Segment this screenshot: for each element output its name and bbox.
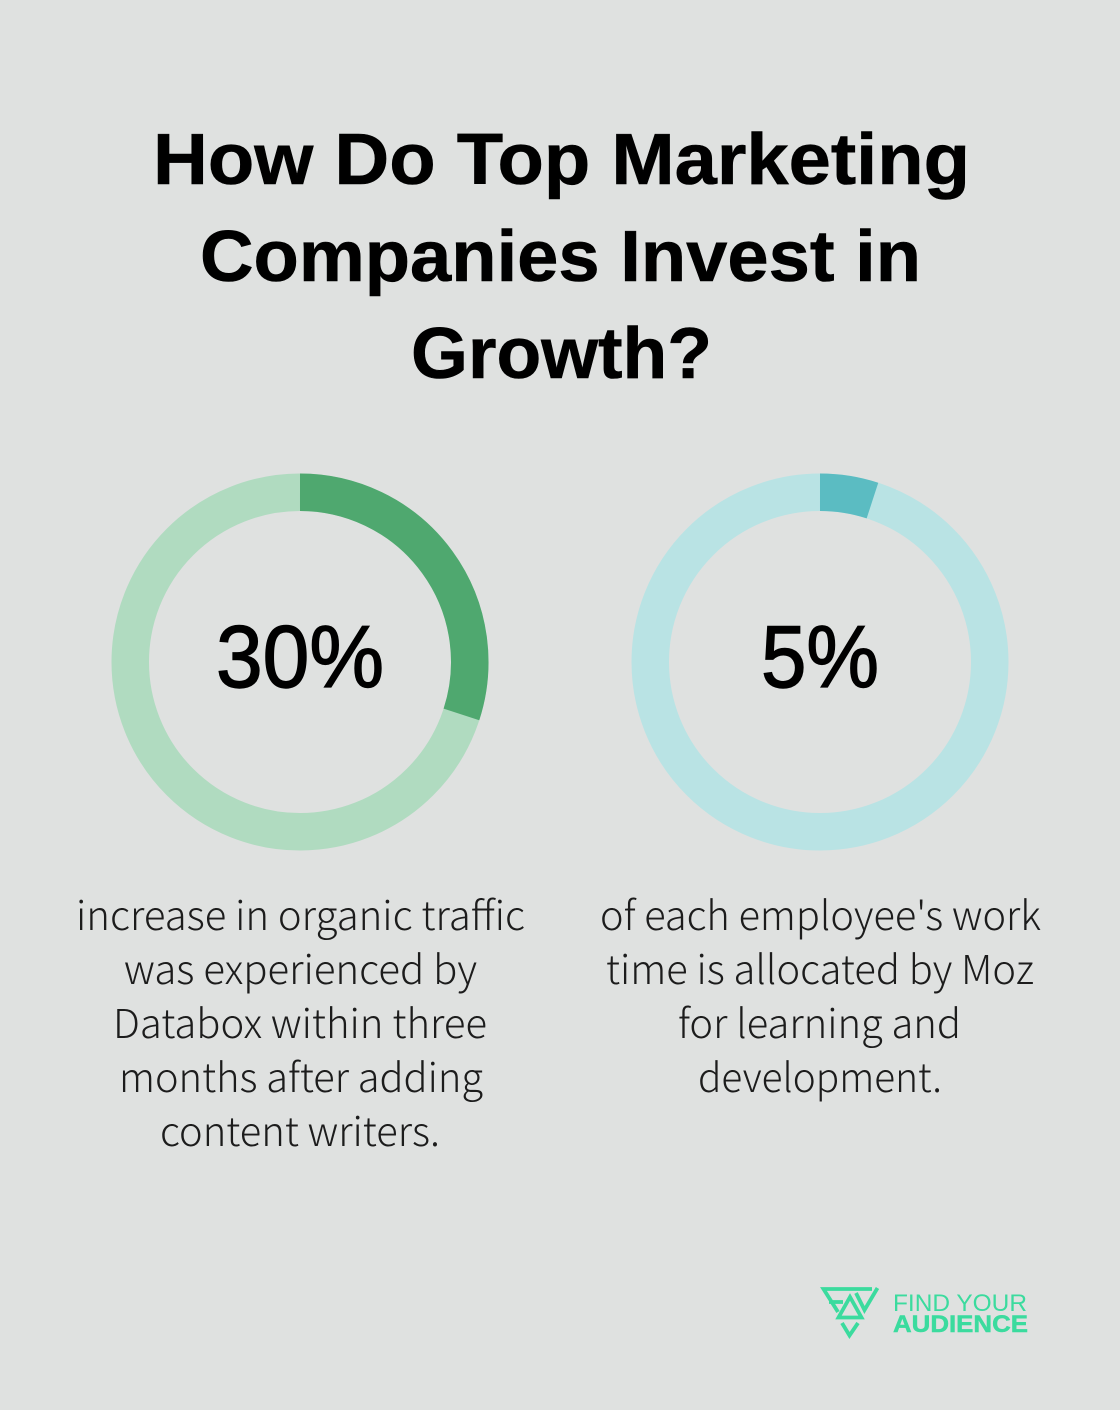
description: 5%: development. xyxy=(698,1046,942,1104)
description: 30%: content writers. xyxy=(160,1100,440,1158)
title: Growth? xyxy=(411,314,712,394)
description: 5%: of each employee's work xyxy=(600,884,1041,942)
description: 30%: months after adding xyxy=(119,1046,483,1104)
donut chart: 30% xyxy=(130,492,470,832)
donut chart: 5% xyxy=(650,492,990,832)
description: 30% xyxy=(76,884,525,1158)
description: 30%: was experienced by xyxy=(124,938,477,996)
stat value: 5%: 5% xyxy=(761,607,879,706)
description: 5%: for learning and xyxy=(678,992,961,1050)
logo wordmark xyxy=(893,1290,1028,1338)
title: Companies Invest in xyxy=(200,217,921,297)
description: 5%: time is allocated by Moz xyxy=(606,938,1034,996)
stat value: 30%: 30% xyxy=(216,607,384,706)
title: How Do Top Marketing xyxy=(153,120,970,200)
logo: Find Your Audience xyxy=(824,1288,1028,1338)
icon: logo mark xyxy=(824,1288,878,1336)
panel: 30% statistic xyxy=(76,492,525,1158)
logo wordmark: AUDIENCE xyxy=(893,1311,1028,1338)
description: 30%: increase in organic traffic xyxy=(76,884,525,942)
description: 5% xyxy=(600,884,1041,1104)
logo wordmark: FIND YOUR xyxy=(893,1290,1027,1317)
panel: 5% statistic xyxy=(600,492,1041,1104)
title xyxy=(153,120,970,394)
description: 30%: Databox within three xyxy=(113,992,487,1050)
